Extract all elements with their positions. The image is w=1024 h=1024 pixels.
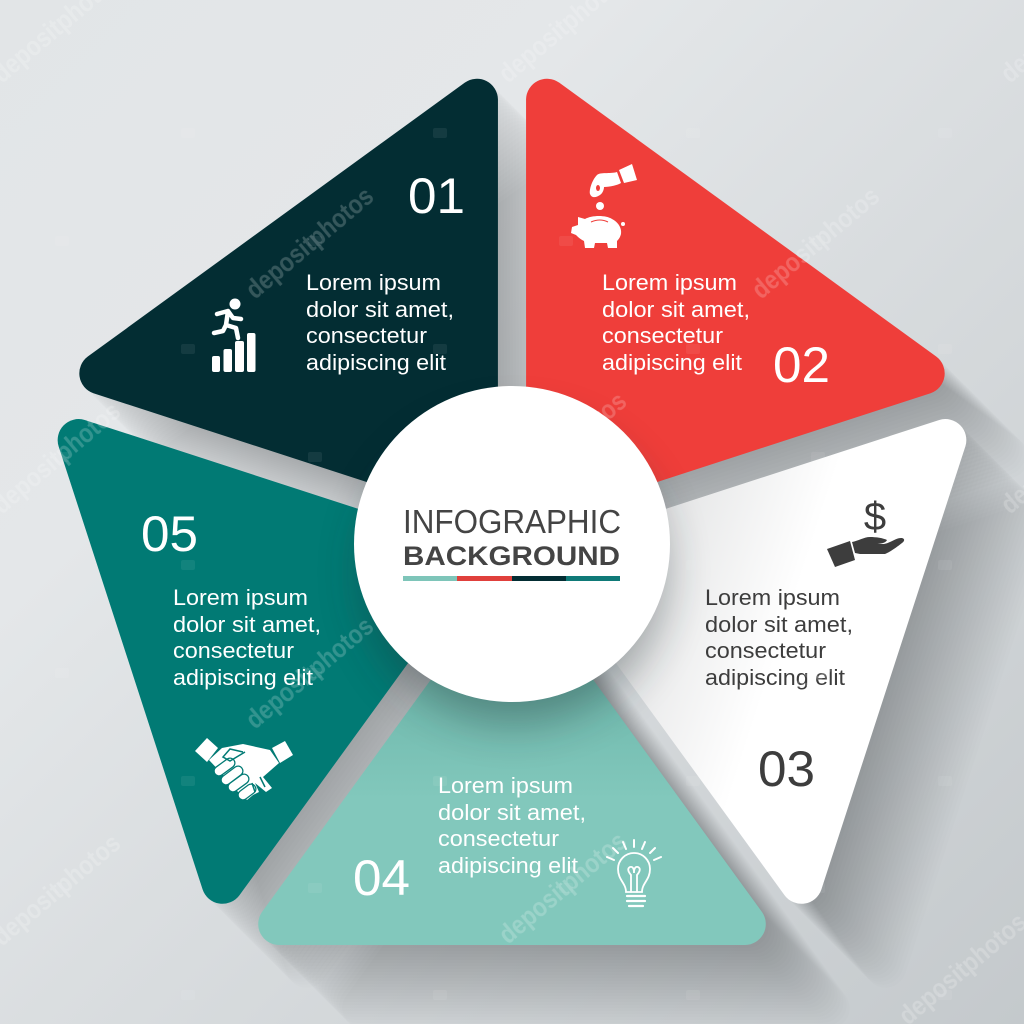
panel 01 text: adipiscing elit [306,350,446,375]
watermarks: depositphotos [493,386,632,510]
panel 03 text: Lorem ipsum [705,585,840,610]
center title: BACKGROUND [403,541,620,571]
watermarks: depositphotos [746,181,885,305]
number 02: 02 [773,337,830,393]
watermarks: depositphotos [493,826,632,950]
number 03: 03 [758,741,815,797]
panel 02 shape [321,70,953,674]
panel 01 text: Lorem ipsum [306,270,441,295]
watermarks: depositphotos [240,611,379,735]
watermark camera marks [55,128,952,1000]
panel 02 text: consectetur [602,323,723,348]
panel 05 text [173,585,321,690]
icon: handshake [195,738,293,800]
number 04: 04 [353,850,410,906]
center circle [354,386,670,702]
panel 03 shape [456,310,972,909]
panel 02 [321,70,953,674]
panel 01 [71,70,703,674]
panel 05 [52,310,568,909]
panel 04 [258,568,766,945]
icon: hand holding dollar: $ [864,495,886,539]
panel 02 text: dolor sit amet, [602,297,750,322]
panel 04 shape [258,568,766,945]
watermarks: depositphotos [746,611,885,735]
icon: runner on rising bars [212,298,256,372]
panel 01 text: consectetur [306,323,427,348]
number 01: 01 [408,168,465,224]
panel 03 text: consectetur [705,638,826,663]
panel 05 shape [52,310,568,909]
panel 01 shape [71,70,703,674]
panel 04 text: adipiscing elit [438,853,578,878]
panel 04 text: consectetur [438,826,559,851]
panel 02 text: Lorem ipsum [602,270,737,295]
center title [403,503,621,571]
circle disc [354,386,670,702]
panel 03 text: adipiscing elit [705,665,845,690]
panel 05 text: consectetur [173,638,294,663]
panel 01 text [306,270,454,375]
panel 05 text: Lorem ipsum [173,585,308,610]
panel 03 text: dolor sit amet, [705,612,853,637]
icon: hand holding dollar [827,495,904,567]
panel 02 text: adipiscing elit [602,350,742,375]
number 05: 05 [141,506,198,562]
panel 04 text: dolor sit amet, [438,800,586,825]
panel 04 text: Lorem ipsum [438,773,573,798]
center title: INFOGRAPHIC [403,503,621,540]
icon: hand dropping coin into piggy bank [571,164,637,248]
panel 02 text [602,270,750,375]
center circle shadow [362,420,666,724]
panel 05 text: adipiscing elit [173,665,313,690]
watermarks: depositphotos [240,181,379,305]
panel 05 text: dolor sit amet, [173,612,321,637]
panel 03 text [705,585,853,690]
panel 04 text [438,773,586,878]
color legend bar [403,576,620,581]
panel 03 [456,310,972,909]
panel 01 text: dolor sit amet, [306,297,454,322]
icon: light bulb [607,840,661,906]
